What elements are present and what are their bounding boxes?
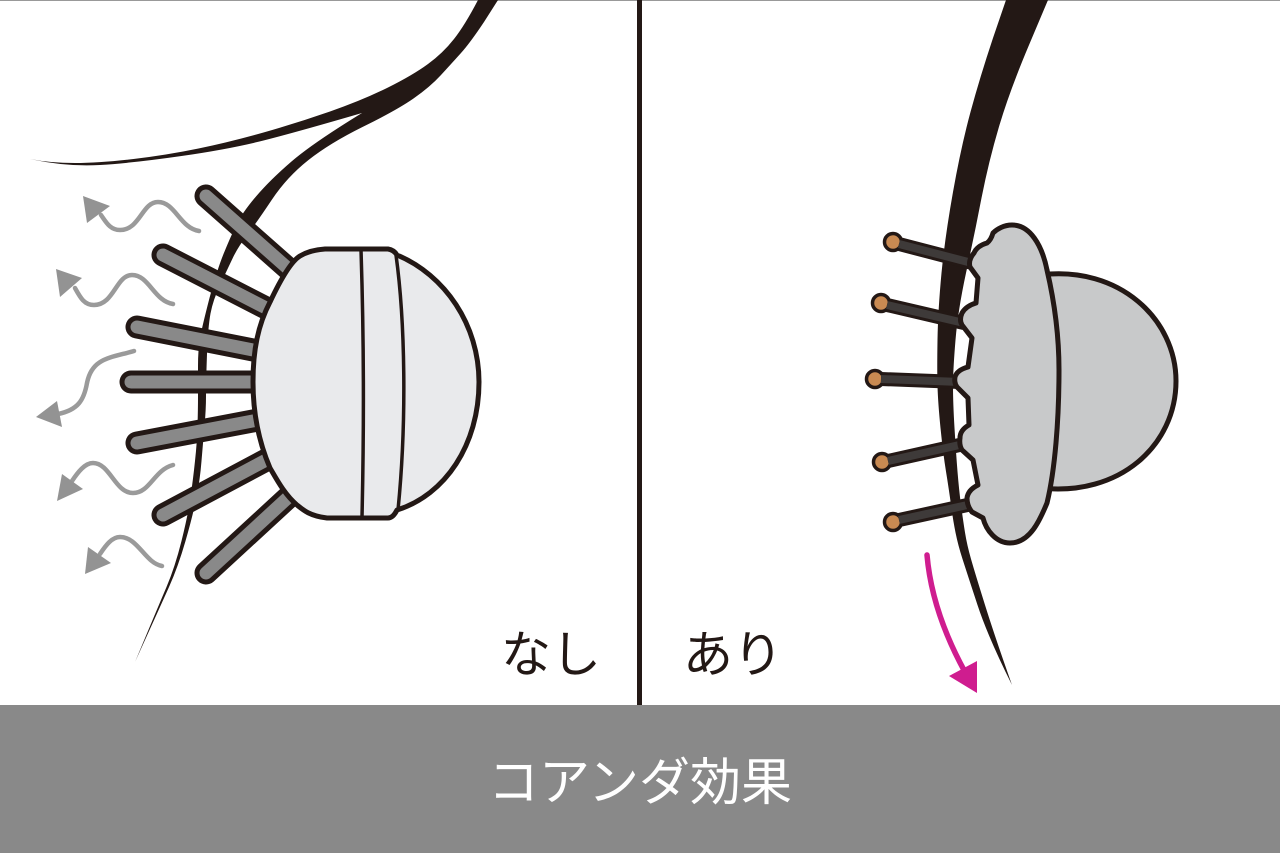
comb bristles	[131, 196, 294, 573]
dryer head	[253, 249, 479, 518]
hair strands deflected	[30, 0, 498, 662]
label: ari: あり	[683, 627, 783, 683]
label: nashi: なし	[501, 627, 601, 683]
pins	[881, 244, 972, 520]
center divider	[637, 0, 642, 705]
panel: with Coanda effect	[683, 0, 1176, 693]
airflow arrows scattering	[58, 202, 199, 566]
soft cushion	[955, 225, 1059, 543]
panel: without Coanda effect	[30, 0, 601, 683]
footer title: コアンダ効果	[488, 754, 792, 811]
airflow arrowheads	[36, 196, 111, 574]
pin tips	[866, 234, 902, 530]
hair strand along head	[937, 0, 1048, 685]
footer band	[0, 705, 1280, 853]
magenta flow arrow	[927, 555, 977, 693]
dryer dome	[1040, 274, 1176, 489]
